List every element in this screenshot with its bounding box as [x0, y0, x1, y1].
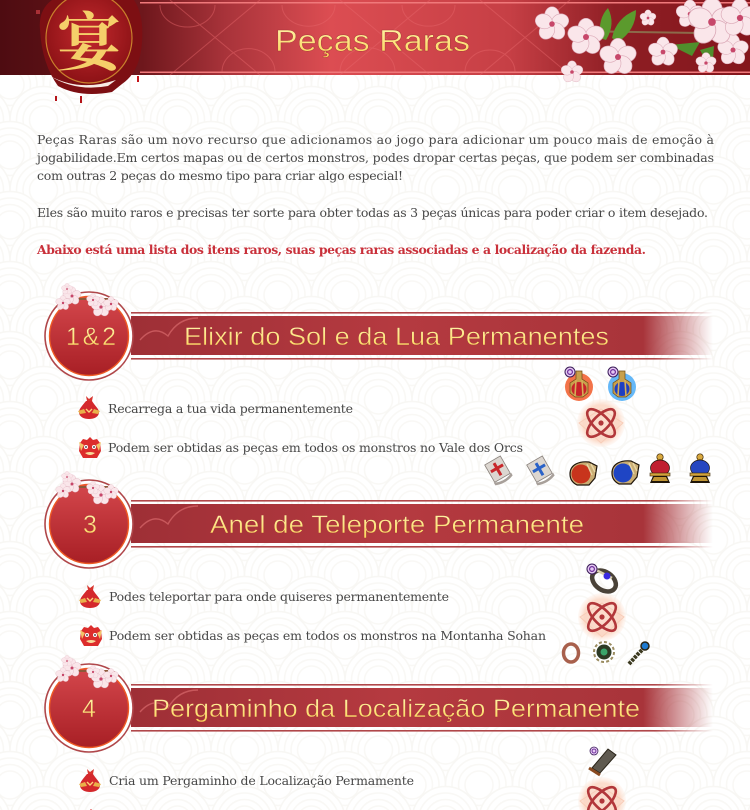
section 1 banner [131, 312, 713, 360]
section 3 number badge [45, 655, 133, 752]
section 1 number badge [45, 283, 133, 380]
intro text block: Eles são muito raros e precisas ter sorte para obter todas as 3 peças únicas para poder criar o item desejado. [37, 205, 708, 220]
effect icon: pouch [79, 769, 101, 792]
combine symbol [577, 399, 625, 447]
required pieces row [484, 454, 710, 487]
section 2 number badge: 3 [83, 511, 97, 539]
item: sun and moon elixirs [565, 367, 636, 401]
section 1 title: Elixir do Sol e da Lua Permanentes [184, 323, 609, 351]
intro text block: com outras 2 peças do mesmo tipo para criar algo especial! [37, 168, 403, 183]
medal emblem [36, 0, 142, 103]
source text: Podem ser obtidas as peças em todos os monstros no Vale dos Orcs [108, 440, 523, 455]
panel: section 2 ring [45, 471, 713, 664]
source icon: lion (cropped) [80, 809, 102, 810]
source icon: lion [79, 437, 101, 458]
item: location scroll [589, 747, 616, 775]
section 2 number badge [45, 471, 133, 568]
effect text: Recarrega a tua vida permanentemente [108, 401, 353, 416]
panel: section 1 elixir [45, 283, 713, 487]
header banner [0, 0, 750, 103]
effect icon: pouch [78, 396, 100, 419]
section 3 title: Pergaminho da Localização Permanente [152, 695, 640, 723]
item: teleport ring [587, 564, 620, 596]
section 3 number badge: 4 [82, 695, 96, 723]
panel: section 3 scroll [45, 655, 713, 810]
intro text block: jogabilidade.Em certos mapas ou de certos monstros, podes dropar certas peças, que podem ser combinadas [35, 150, 714, 165]
effect text: Cria um Pergaminho de Localização Permamente [109, 773, 414, 788]
section 3 banner [131, 684, 713, 732]
header title: Peças Raras [275, 23, 470, 58]
effect icon: pouch [79, 585, 101, 608]
required pieces row [564, 642, 649, 664]
header cherry blossoms [533, 0, 750, 84]
section 2 title: Anel de Teleporte Permanente [210, 511, 584, 539]
source icon: lion [80, 625, 102, 646]
intro text block: Peças Raras são um novo recurso que adicionamos ao jogo para adicionar um pouco mais de emoção à [37, 132, 715, 147]
source text: Podem ser obtidas as peças em todos os monstros na Montanha Sohan [109, 628, 546, 643]
red highlight note: Abaixo está uma lista dos itens raros, suas peças raras associadas e a localização da fazenda. [36, 242, 646, 257]
effect text: Podes teleportar para onde quiseres permanentemente [109, 589, 449, 604]
section 2 banner [131, 500, 713, 548]
intro text block [35, 132, 715, 257]
combine symbol [578, 593, 626, 641]
combine symbol [578, 777, 626, 810]
section 1 number badge: 1 & 2 [66, 323, 116, 351]
